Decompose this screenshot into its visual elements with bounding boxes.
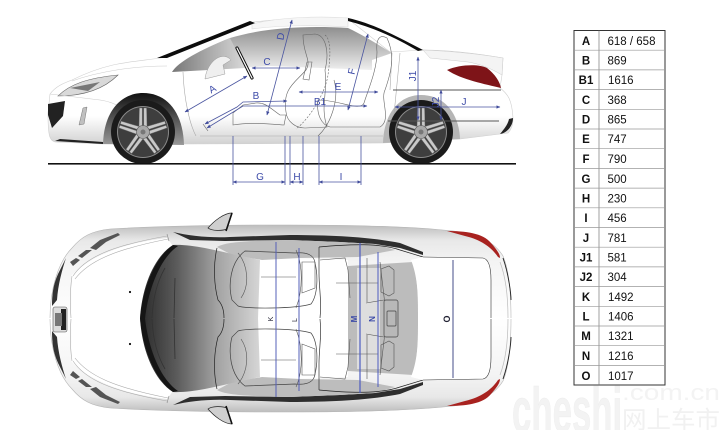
lower half of car (50, 318, 511, 424)
dimension B: B (253, 91, 260, 102)
row F (582, 154, 627, 166)
row J1: 581 (608, 252, 627, 264)
row K: 1492 (608, 292, 634, 304)
row O: 1017 (608, 371, 634, 383)
soft-top rear edge (348, 18, 423, 51)
front wheel (111, 100, 175, 164)
rear bumper (500, 118, 513, 134)
dimension B (205, 91, 287, 124)
upper half of car (50, 213, 511, 319)
hood line (50, 66, 167, 130)
row E: 747 (608, 134, 627, 146)
row G (582, 174, 627, 186)
row L (582, 312, 634, 324)
dimension I (319, 136, 361, 185)
boot lip (423, 50, 503, 75)
dimension D: D (275, 32, 288, 41)
dimension L: L (292, 318, 299, 322)
row H: H (582, 194, 590, 206)
dimension A: A (207, 83, 219, 96)
dimension N: N (368, 316, 377, 322)
row C (582, 95, 627, 107)
headlight (58, 75, 118, 96)
front wheel arch (103, 93, 184, 145)
row A (582, 36, 655, 48)
rear wheel (389, 100, 453, 164)
dimension B1 (207, 97, 367, 128)
row D: 865 (608, 114, 627, 126)
dimension O (442, 260, 453, 378)
row M: 1321 (608, 331, 634, 343)
dimension M: M (350, 315, 359, 322)
row G: G (582, 174, 591, 186)
dimension G: G (256, 172, 264, 183)
dimension J1 (408, 57, 419, 120)
row K (582, 292, 634, 304)
door mirror (205, 56, 231, 79)
row B1: 1616 (608, 75, 634, 87)
dimension H (290, 136, 303, 185)
top view car (50, 213, 511, 424)
dimension C: C (263, 57, 271, 68)
dimension J2 (431, 90, 442, 120)
row E: E (582, 134, 590, 146)
row H (582, 194, 627, 206)
row D (582, 114, 627, 126)
dark reference lines (388, 90, 501, 121)
row A: A (582, 36, 590, 48)
washer jets (129, 291, 131, 345)
row L: L (582, 312, 590, 324)
dimension B1: B1 (314, 97, 327, 108)
dimension C (252, 57, 300, 68)
side windows (172, 27, 392, 72)
watermark: .com.cn (622, 380, 720, 405)
dimension O: O (442, 315, 452, 323)
front grille (48, 101, 65, 128)
dimension D (267, 20, 292, 115)
dimension J2: J2 (431, 96, 442, 107)
row F: 790 (608, 154, 627, 166)
lower front shadow (55, 139, 103, 144)
row I: I (584, 213, 588, 225)
fog light (79, 107, 87, 125)
row B: 869 (608, 56, 627, 68)
row K: K (582, 292, 591, 304)
dimension E: E (335, 82, 342, 93)
row I (584, 213, 627, 225)
dimension E (299, 82, 378, 93)
dimension J (395, 97, 500, 108)
lion badge (53, 307, 67, 332)
row J: 781 (608, 233, 627, 245)
row A: 618 / 658 (608, 36, 655, 48)
row J2: J2 (580, 272, 592, 284)
row M (581, 331, 634, 343)
steering wheel (237, 48, 252, 78)
watermark (512, 375, 720, 430)
row L: 1406 (608, 312, 634, 324)
row C: 368 (608, 95, 627, 107)
row H: 230 (608, 194, 627, 206)
row J: J (583, 233, 589, 245)
side view car (48, 17, 516, 185)
dimension G (233, 136, 285, 185)
row B: B (582, 56, 590, 68)
door and body lines (183, 53, 400, 136)
row G: 500 (608, 174, 627, 186)
row J (583, 233, 627, 245)
windshield strip (157, 21, 255, 58)
row E (582, 134, 627, 146)
dimension H: H (293, 172, 301, 183)
rear wheel arch (383, 95, 460, 143)
row O: O (582, 371, 591, 383)
row N: N (582, 351, 590, 363)
dimension J1: J1 (408, 70, 419, 81)
row B1: B1 (579, 75, 594, 87)
boot handle (384, 300, 398, 337)
ground line (48, 163, 516, 165)
row M: M (581, 331, 591, 343)
dimensions table (574, 30, 665, 385)
row F: F (582, 154, 590, 166)
row I: 456 (608, 213, 627, 225)
dimension N (368, 252, 378, 387)
row N (582, 351, 634, 363)
row J2: 304 (608, 272, 627, 284)
row O (582, 371, 634, 383)
row J2 (580, 272, 627, 284)
dimension F (347, 34, 368, 110)
dimension A (185, 76, 247, 112)
tail light (447, 65, 501, 88)
seats and pedal outlines (203, 34, 392, 136)
dimension F: F (347, 67, 359, 76)
dimension I: I (340, 172, 342, 183)
row J1: J1 (580, 252, 593, 264)
car body side (48, 18, 513, 144)
row B (582, 56, 627, 68)
row D: D (582, 114, 590, 126)
roof top edge (252, 17, 348, 29)
dimension K: K (268, 316, 275, 321)
row C: C (582, 95, 590, 107)
dimension J: J (462, 97, 466, 108)
row J1 (580, 252, 627, 264)
row B1 (579, 75, 634, 87)
row N: 1216 (608, 351, 634, 363)
